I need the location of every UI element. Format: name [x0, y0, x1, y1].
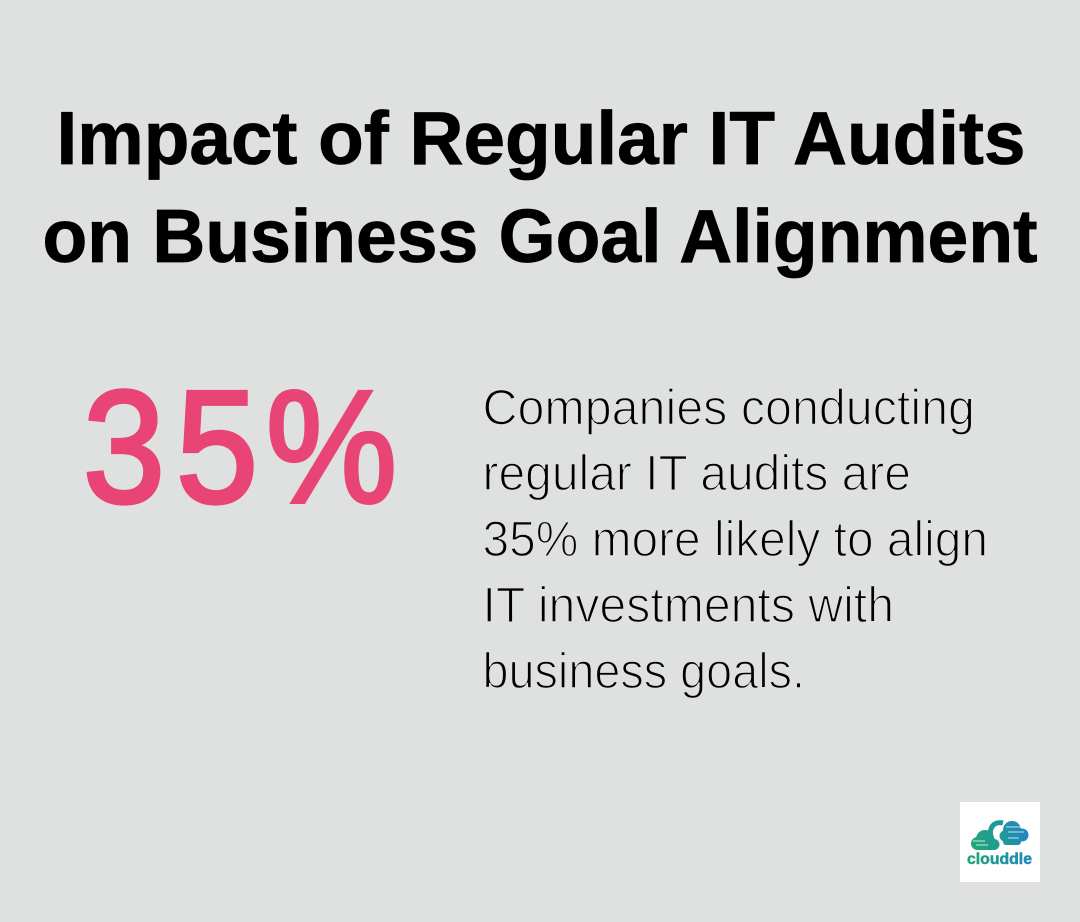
icon: cloud circuit lines [973, 827, 1024, 845]
icon: left cloud [971, 830, 1000, 850]
title [42, 96, 1038, 278]
logo wordmark: clouddle [967, 851, 1032, 868]
big statistic: 35%: 5 [176, 357, 258, 536]
description text: Companies conducting [482, 380, 975, 436]
description text [482, 380, 988, 699]
big statistic: 35% [83, 357, 397, 536]
icon: right cloud [990, 821, 1028, 845]
big statistic: 35%: % [266, 357, 397, 536]
logo background [960, 802, 1040, 882]
logo: clouddle [960, 802, 1040, 882]
description text: 35% more likely to align [482, 511, 988, 567]
title: Impact of Regular IT Audits [56, 96, 1026, 180]
description text: regular IT audits are [482, 445, 911, 501]
description text: IT investments with [482, 577, 894, 633]
description text: business goals. [482, 643, 805, 699]
title: on Business Goal Alignment [42, 194, 1038, 278]
big statistic: 35%: 3 [83, 357, 165, 536]
